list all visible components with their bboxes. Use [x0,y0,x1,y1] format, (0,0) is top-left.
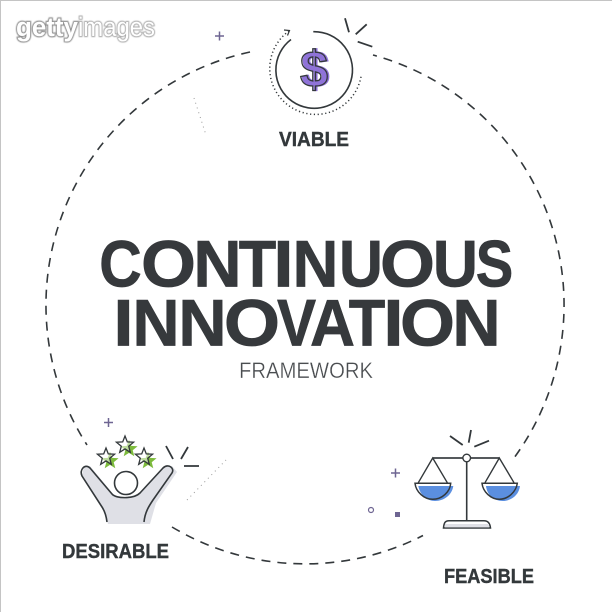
watermark [16,12,155,42]
decorative plus and dot marks [104,32,400,517]
title: V [277,286,316,360]
label: feasible: FEASIBLE [444,566,534,588]
title [99,226,513,360]
title: O [380,226,435,300]
watermark: images [78,12,155,42]
icon: dollar coin: $ [300,40,328,98]
icon: dollar coin [270,18,372,114]
title: O [141,226,196,300]
icon: cheering person with stars [81,436,199,524]
title: N [178,286,227,360]
watermark: images [78,12,155,42]
title: N [193,226,242,300]
title: I [383,286,404,360]
title: I [113,286,134,360]
title: N [293,226,338,300]
title: N [452,286,501,360]
title: I [273,226,294,300]
title: O [400,286,455,360]
watermark: getty [16,12,78,42]
title: T [239,226,276,300]
icon: balance scale [415,430,520,528]
title: N [132,286,180,360]
title: U [339,226,383,300]
title: O [224,286,280,360]
label: viable: VIABLE [279,129,349,151]
title: C [99,226,142,300]
subtitle: FRAMEWORK [239,358,373,383]
title: A [310,286,355,360]
label: desirable: DESIRABLE [62,540,169,563]
dashed cycle ring [46,52,564,564]
watermark: getty [16,12,78,42]
icon: dollar coin: $ [302,40,330,98]
title: T [349,286,385,360]
title: S [476,226,513,300]
title: U [433,226,478,300]
